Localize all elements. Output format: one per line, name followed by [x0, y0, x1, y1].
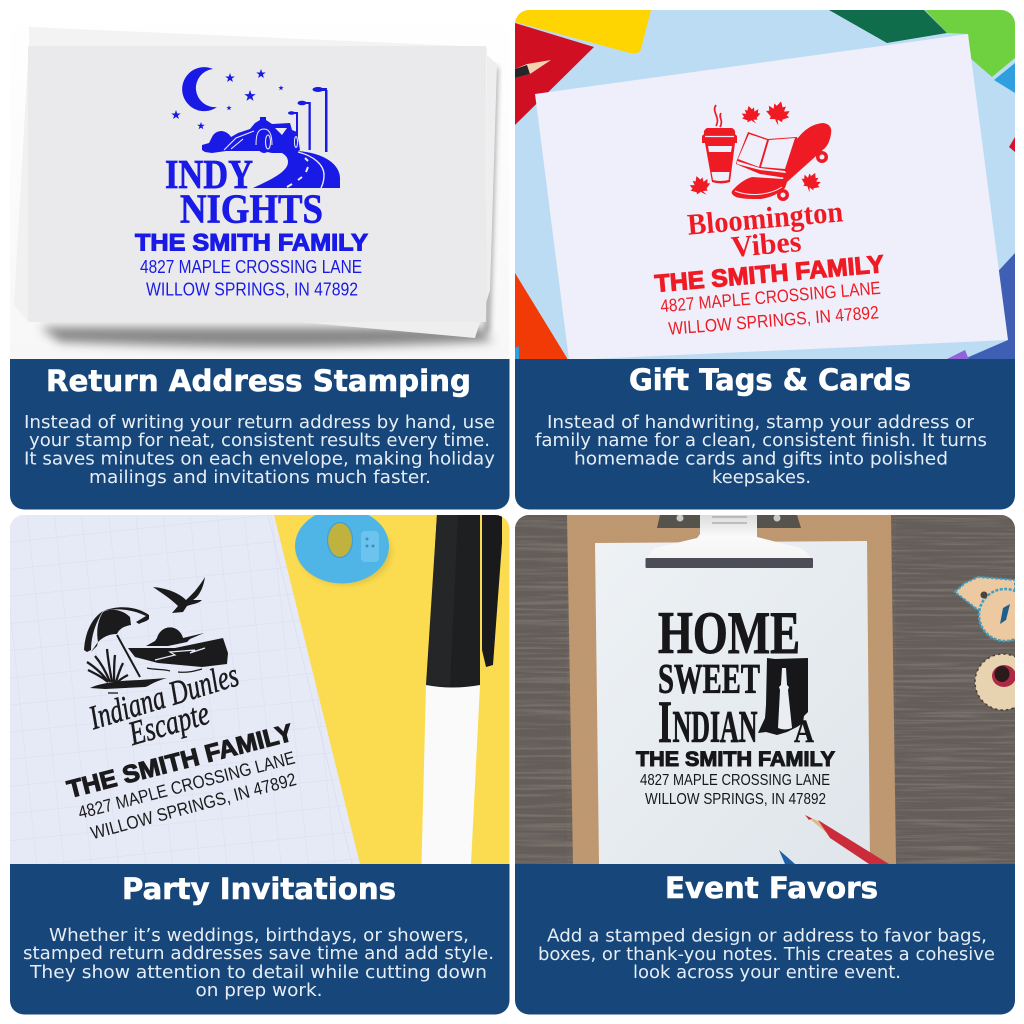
- stamp address block: WILLOW SPRINGS, IN 47892: [645, 791, 826, 808]
- photo: graph paper and marker on yellow: [10, 508, 510, 865]
- caption: gift tags and cards: Gift Tags & Cards: [629, 363, 911, 397]
- stamp: home sweet indiana lettering: HOME: [658, 600, 800, 666]
- stamp address block: 4827 MAPLE CROSSING LANE: [640, 772, 830, 789]
- icon: coffee cup: [702, 105, 737, 184]
- stamp address block: [636, 747, 835, 808]
- stamp title: indiana dunles escapte: [89, 668, 239, 746]
- icon: open book: [736, 132, 800, 178]
- stamp title: bloomington vibes: [687, 206, 844, 257]
- panel: gift tags and cards: [515, 10, 1015, 510]
- panel: return address stamping: [10, 10, 510, 510]
- caption: party invitations: on prep work.: [196, 981, 322, 1001]
- icon: beach umbrella: [84, 607, 149, 677]
- stamp address block: 4827 MAPLE CROSSING LANE: [660, 278, 881, 316]
- caption: event favors: Add a stamped design or address to favor bags,: [547, 926, 987, 946]
- caption: return address stamping: Instead of writing your return address by hand, use: [24, 413, 495, 433]
- stamp: home sweet indiana lettering: NDIAN: [672, 702, 758, 752]
- icon: metal clip: [646, 514, 813, 568]
- icon: stars: [171, 69, 284, 129]
- icon: seagull: [153, 577, 205, 613]
- stamp address block: 4827 MAPLE CROSSING LANE: [140, 257, 362, 277]
- icon: pencils: [779, 815, 889, 864]
- stamp address block: THE SMITH FAMILY: [64, 720, 296, 804]
- stamp title: indy nights: INDY: [165, 151, 253, 197]
- stamp title: bloomington vibes: Bloomington: [686, 195, 845, 242]
- caption: gift tags and cards: keepsakes.: [712, 468, 811, 488]
- stamp title: indy nights: [166, 160, 322, 224]
- caption: return address stamping: Return Address Stamping: [46, 364, 471, 398]
- caption: return address stamping: [10, 359, 510, 510]
- caption: return address stamping: It saves minutes on each envelope, making holiday: [24, 450, 495, 470]
- stamp address block: [654, 251, 885, 339]
- caption: event favors: boxes, or thank-you notes. This creates a cohesive: [538, 945, 995, 965]
- stamp address block: WILLOW SPRINGS, IN 47892: [668, 302, 879, 339]
- stamp address block: [64, 720, 298, 843]
- icon: blue binder ring: [295, 508, 391, 585]
- stamp: home sweet indiana lettering: [658, 612, 814, 742]
- stamp address block: [135, 230, 368, 300]
- stamp address block: 4827 MAPLE CROSSING LANE: [76, 748, 297, 823]
- stamp: bloomington icons: [687, 98, 831, 201]
- caption: party invitations: Party Invitations: [122, 872, 396, 906]
- stamp title: bloomington vibes: Vibes: [730, 225, 802, 264]
- caption: return address stamping: your stamp for neat, consistent results every time.: [29, 431, 490, 451]
- caption: party invitations: [10, 864, 510, 1014]
- icon: maple leaves: [690, 101, 821, 195]
- icon: skateboard: [732, 123, 831, 201]
- icon: indiana state with lighthouse: [758, 658, 808, 735]
- panel: party invitations: [10, 508, 510, 1014]
- stamp address block: THE SMITH FAMILY: [135, 230, 368, 256]
- stamp: indy nights artwork: [171, 67, 340, 188]
- stamp address block: THE SMITH FAMILY: [654, 251, 885, 298]
- caption: party invitations: stamped return addresses save time and add style.: [23, 944, 494, 964]
- icon: race car: [202, 117, 300, 153]
- panel: event favors: [515, 514, 1024, 1014]
- stamp address block: THE SMITH FAMILY: [636, 747, 835, 771]
- photo: clipboard on wood table: [515, 514, 1024, 865]
- icon: sun and shoreline: [128, 627, 228, 672]
- icon: crescent moon: [182, 67, 217, 111]
- caption: gift tags and cards: homemade cards and gifts into polished: [574, 450, 948, 470]
- stamp: home sweet indiana lettering: A: [794, 714, 814, 750]
- caption: party invitations: They show attention to detail while cutting down: [29, 963, 487, 983]
- icon: dune grass: [87, 649, 167, 693]
- caption: gift tags and cards: [515, 359, 1015, 510]
- caption: gift tags and cards: Instead of handwriting, stamp your address or: [547, 413, 975, 433]
- caption: event favors: Event Favors: [665, 871, 878, 905]
- photo: card on colored notebooks: [515, 10, 1015, 360]
- stamp address block: WILLOW SPRINGS, IN 47892: [88, 769, 298, 843]
- caption: event favors: look across your entire event.: [633, 963, 901, 983]
- stamp: home sweet indiana lettering: SWEET: [658, 657, 760, 703]
- stamp address block: WILLOW SPRINGS, IN 47892: [146, 280, 358, 300]
- icon: street lamps: [288, 87, 328, 152]
- caption: event favors: [515, 864, 1015, 1014]
- stamp title: indiana dunles escapte: Indiana Dunles: [84, 657, 243, 737]
- stamp: home sweet indiana lettering: I: [658, 689, 672, 755]
- caption: party invitations: Whether it’s weddings, birthdays, or showers,: [49, 926, 469, 946]
- icon: curved road: [253, 151, 340, 188]
- stamp title: indy nights: NIGHTS: [180, 186, 323, 232]
- stamp: beach scene artwork: [84, 577, 228, 693]
- icon: pencil shavings: [955, 577, 1024, 710]
- icon: black and white marker: [422, 514, 502, 864]
- caption: return address stamping: mailings and invitations much faster.: [89, 468, 431, 488]
- caption: gift tags and cards: family name for a clean, consistent finish. It turns: [535, 431, 987, 451]
- photo: stacked white cards: [10, 10, 510, 360]
- stamp title: indiana dunles escapte: Escapte: [124, 695, 214, 753]
